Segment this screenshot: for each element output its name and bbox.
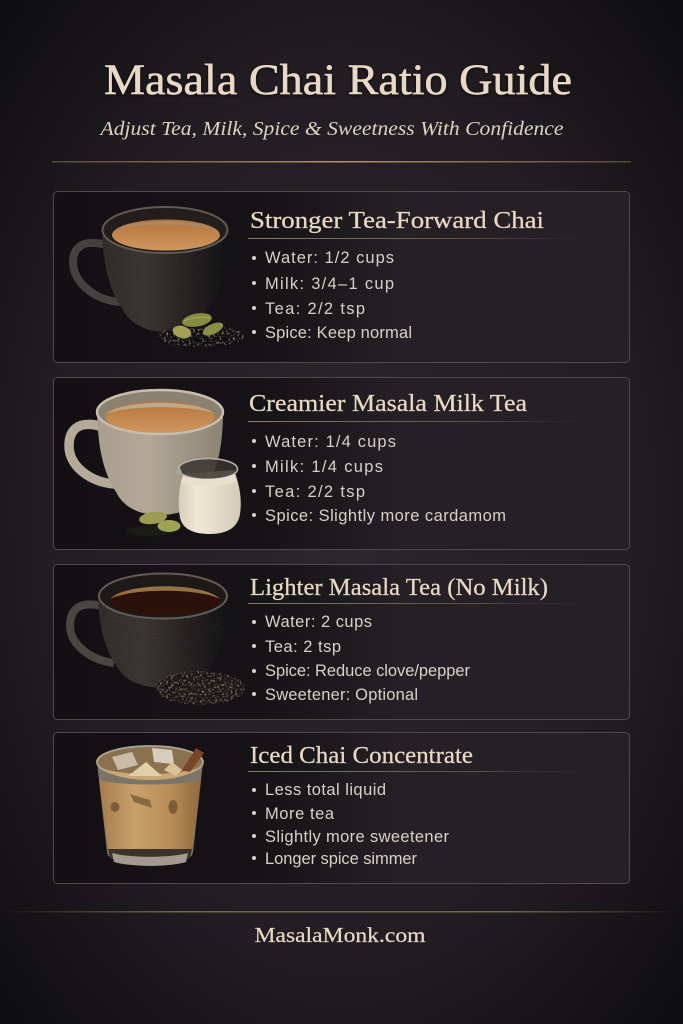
panel: lighter masala tea (54, 564, 630, 720)
heading: stronger: Stronger Tea-Forward Chai (250, 207, 544, 234)
panel: stronger tea-forward chai (54, 192, 630, 362)
subtitle: Adjust Tea, Milk, Spice & Sweetness With Confidence (98, 118, 564, 140)
icon: dark mug with chai and cardamom (73, 207, 244, 347)
list: lighter (252, 613, 470, 704)
list: stronger: Water: 1/2 cups (265, 249, 394, 267)
icon: cream mug with milk jug (69, 390, 241, 536)
list: iced: Longer spice simmer (265, 850, 418, 868)
panel: creamier masala milk tea (54, 378, 630, 550)
panel: iced chai concentrate (54, 732, 630, 884)
list: creamier (252, 433, 506, 525)
list: creamier: Tea: 2/2 tsp (265, 483, 365, 501)
list: lighter: Sweetener: Optional (265, 686, 418, 704)
heading: lighter: Lighter Masala Tea (No Milk) (250, 574, 548, 601)
heading: creamier: Creamier Masala Milk Tea (249, 390, 527, 417)
heading: iced: Iced Chai Concentrate (250, 742, 473, 769)
list: lighter: Tea: 2 tsp (265, 638, 341, 656)
list: stronger: Tea: 2/2 tsp (265, 300, 365, 318)
title: Masala Chai Ratio Guide (104, 57, 572, 104)
footer: MasalaMonk.com (254, 923, 426, 947)
list: creamier: Water: 1/4 cups (265, 433, 396, 451)
list: iced: Slightly more sweetener (265, 828, 450, 846)
list: stronger: Milk: 3/4–1 cup (265, 275, 394, 293)
list: lighter: Water: 2 cups (265, 613, 372, 631)
list: iced: Less total liquid (265, 781, 386, 799)
list: creamier: Milk: 1/4 cups (265, 458, 383, 476)
list: stronger (252, 249, 412, 342)
list: stronger: Spice: Keep normal (265, 324, 412, 342)
list: creamier: Spice: Slightly more cardamom (265, 507, 506, 525)
icon: dark mug with black tea and leaves (70, 574, 245, 705)
list: lighter: Spice: Reduce clove/pepper (265, 662, 470, 680)
list: iced (252, 781, 450, 868)
list: iced: More tea (265, 805, 335, 823)
icon: iced chai glass with cinnamon (97, 746, 204, 866)
